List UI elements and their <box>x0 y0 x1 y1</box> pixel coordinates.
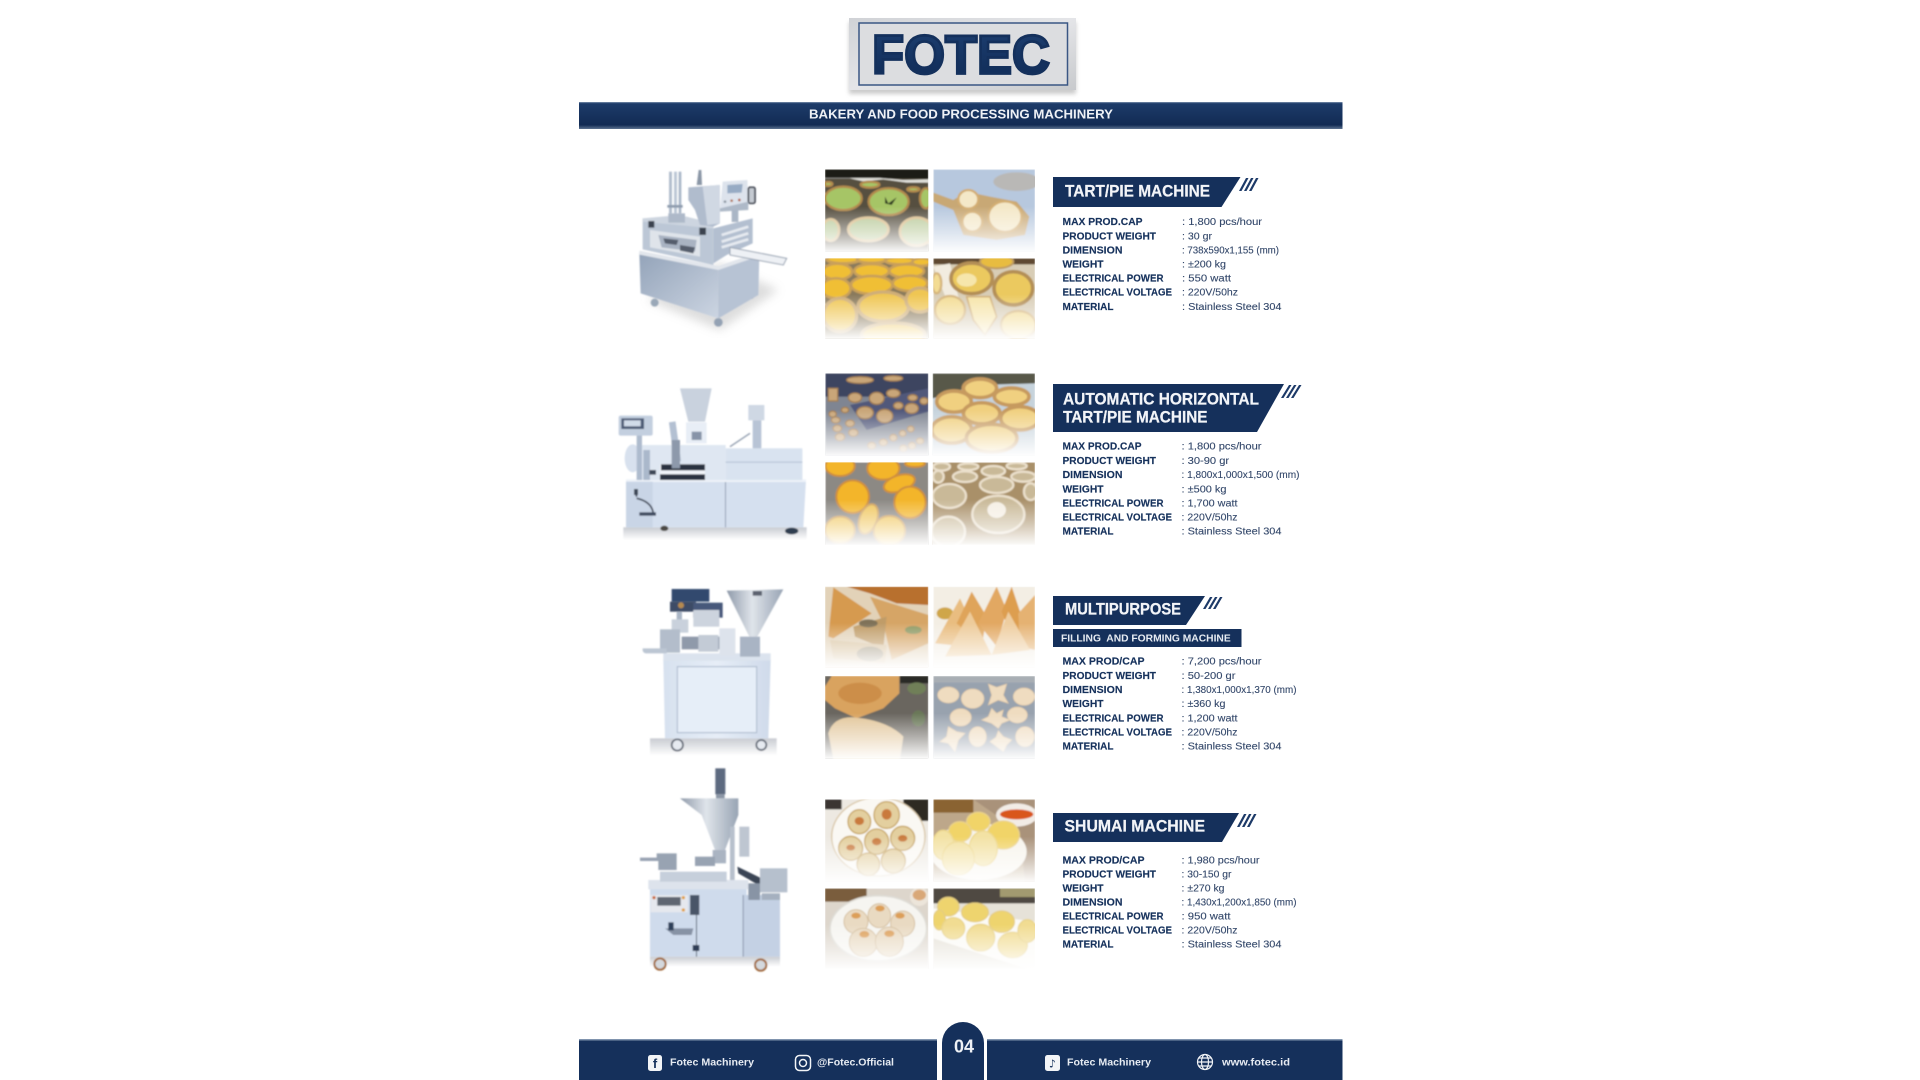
machine photo: shumai <box>640 768 787 971</box>
specifications: multipurpose: : 7,200 pcs/hour <box>1182 656 1262 668</box>
specifications: multipurpose: : Stainless Steel 304 <box>1182 741 1282 753</box>
specifications: tart/pie machine: ELECTRICAL POWER <box>1062 273 1164 285</box>
section: tart/pie machine <box>639 169 1282 347</box>
specifications: automatic horizontal: ELECTRICAL VOLTAGE <box>1062 512 1172 524</box>
specifications: automatic horizontal: : 30-90 gr <box>1182 455 1230 467</box>
specifications: multipurpose: : ±360 kg <box>1182 698 1226 710</box>
specifications: automatic horizontal: PRODUCT WEIGHT <box>1062 455 1157 467</box>
photo: shumai on plate <box>825 799 928 877</box>
icon: tiktok: ♪ <box>1049 1058 1056 1070</box>
specifications: automatic horizontal: ELECTRICAL POWER <box>1062 498 1164 510</box>
specifications: automatic horizontal: : ±500 kg <box>1182 484 1227 496</box>
icon: globe <box>1198 1054 1212 1070</box>
heading: automatic horizontal tart/pie machine: TART/PIE MACHINE <box>1063 408 1208 426</box>
heading: multipurpose <box>1053 596 1222 625</box>
specifications: multipurpose: ELECTRICAL POWER <box>1062 713 1164 725</box>
specifications: tart/pie machine: : 220V/50hz <box>1182 287 1238 299</box>
specifications: multipurpose <box>1062 656 1296 752</box>
specifications: automatic horizontal: : 1,800 pcs/hour <box>1182 441 1262 453</box>
photo: golden tarts <box>932 373 1035 456</box>
machine photo: tart/pie machine <box>639 170 787 330</box>
specifications: shumai machine: ELECTRICAL POWER <box>1062 911 1164 923</box>
specifications: tart/pie machine: : 30 gr <box>1182 230 1212 242</box>
photo: tart shells <box>933 258 1035 338</box>
section: automatic horizontal tart/pie machine <box>619 373 1302 547</box>
specifications: multipurpose: : 1,200 watt <box>1182 713 1238 725</box>
logo: FOTEC <box>849 18 1076 94</box>
machine photo: automatic horizontal <box>619 388 807 540</box>
specifications: automatic horizontal: MAX PROD.CAP <box>1062 441 1142 453</box>
specifications: tart/pie machine: MATERIAL <box>1062 301 1114 313</box>
machine photo: multipurpose <box>643 589 783 756</box>
photo: cream pies <box>932 462 1035 545</box>
specifications: shumai machine: ELECTRICAL VOLTAGE <box>1062 925 1172 937</box>
specifications: shumai machine: : 1,980 pcs/hour <box>1182 855 1260 867</box>
specifications: automatic horizontal: WEIGHT <box>1062 484 1104 496</box>
footer bar <box>579 1022 1342 1080</box>
icon: facebook <box>648 1055 662 1071</box>
title banner: BAKERY AND FOOD PROCESSING MACHINERY <box>809 106 1113 122</box>
specifications: multipurpose: : 1,380x1,000x1,370 (mm) <box>1182 684 1296 696</box>
specifications: tart/pie machine: : 1,800 pcs/hour <box>1182 216 1263 228</box>
specifications: automatic horizontal: MATERIAL <box>1062 526 1114 538</box>
specifications: multipurpose: DIMENSION <box>1062 684 1122 696</box>
specifications: tart/pie machine: : 738x590x1,155 (mm) <box>1182 244 1279 256</box>
photo: tart shells on tray <box>825 373 928 456</box>
tiktok label: Fotec Machinery <box>1067 1056 1151 1068</box>
specifications: multipurpose: : 220V/50hz <box>1182 727 1238 739</box>
specifications: tart/pie machine: : 550 watt <box>1182 273 1231 285</box>
instagram label: @Fotec.Official <box>817 1056 894 1068</box>
section: shumai machine <box>640 768 1296 971</box>
specifications: shumai machine: PRODUCT WEIGHT <box>1062 869 1157 881</box>
specifications: multipurpose: ELECTRICAL VOLTAGE <box>1062 727 1172 739</box>
section: multipurpose machine <box>643 587 1296 758</box>
photo: yellow shumai with sauce <box>933 799 1035 882</box>
specifications: tart/pie machine: : Stainless Steel 304 <box>1182 301 1282 313</box>
specifications: shumai machine: : Stainless Steel 304 <box>1182 939 1282 951</box>
photo: shumai on tray <box>933 888 1035 962</box>
facebook label: Fotec Machinery <box>670 1056 754 1068</box>
specifications: tart/pie machine: DIMENSION <box>1062 244 1122 256</box>
specifications: shumai machine: DIMENSION <box>1062 897 1122 909</box>
icon: instagram <box>796 1056 810 1070</box>
heading: automatic horizontal tart/pie machine: AUTOMATIC HORIZONTAL <box>1063 390 1259 408</box>
photo: cookies <box>933 676 1035 758</box>
photo: pastry triangles <box>934 586 1035 658</box>
sub-heading: filling and forming machine <box>1053 629 1242 647</box>
heading: tart/pie machine <box>1053 177 1258 207</box>
heading: tart/pie machine: TART/PIE MACHINE <box>1065 182 1210 200</box>
specifications: multipurpose: : 50-200 gr <box>1182 670 1236 682</box>
photo: samosas <box>825 586 928 668</box>
specifications: shumai machine: WEIGHT <box>1062 883 1104 895</box>
page number tab <box>942 1022 984 1080</box>
specifications: shumai machine: : 1,430x1,200x1,850 (mm) <box>1182 897 1296 909</box>
food photos: multipurpose <box>825 587 1035 758</box>
sub-heading: filling and forming machine: FILLING AND FORMING MACHINE <box>1061 632 1231 644</box>
specifications: shumai machine: MAX PROD/CAP <box>1062 855 1144 867</box>
specifications: shumai machine: : 220V/50hz <box>1182 925 1238 937</box>
specifications: automatic horizontal: : 220V/50hz <box>1182 512 1238 524</box>
website label: www.fotec.id <box>1221 1056 1290 1068</box>
specifications: multipurpose: PRODUCT WEIGHT <box>1062 670 1157 682</box>
photo: empanadas <box>825 676 928 758</box>
specifications: tart/pie machine: : ±200 kg <box>1182 258 1226 270</box>
specifications: multipurpose: WEIGHT <box>1062 698 1104 710</box>
specifications: shumai machine: : 950 watt <box>1182 911 1231 923</box>
specifications: automatic horizontal: : 1,700 watt <box>1182 498 1238 510</box>
specifications: tart/pie machine: ELECTRICAL VOLTAGE <box>1062 287 1172 299</box>
specifications: automatic horizontal: DIMENSION <box>1062 469 1122 481</box>
specifications: multipurpose: MATERIAL <box>1062 741 1114 753</box>
photo: cream tarts on board <box>933 170 1035 251</box>
page number tab: 04 <box>954 1036 974 1056</box>
heading: shumai machine: SHUMAI MACHINE <box>1064 818 1205 836</box>
specifications: shumai machine: MATERIAL <box>1062 939 1114 951</box>
logo: FOTEC: FOTEC <box>872 24 1050 86</box>
specifications: automatic horizontal <box>1062 440 1300 538</box>
specifications: shumai machine <box>1062 854 1296 950</box>
specifications: tart/pie machine: PRODUCT WEIGHT <box>1062 230 1157 242</box>
photo: egg tarts <box>825 258 928 338</box>
specifications: shumai machine: : 30-150 gr <box>1182 869 1232 881</box>
specifications: shumai machine: : ±270 kg <box>1182 883 1225 895</box>
heading: automatic horizontal tart/pie machine <box>1053 384 1302 432</box>
icon: tiktok <box>1045 1055 1060 1071</box>
photo: orange tarts <box>825 462 928 545</box>
specifications: tart/pie machine: WEIGHT <box>1062 258 1104 270</box>
heading: shumai machine <box>1053 813 1256 842</box>
food photos: tart/pie <box>821 169 1040 347</box>
specifications: tart/pie machine: MAX PROD.CAP <box>1062 216 1142 228</box>
icon: facebook: f <box>653 1056 658 1071</box>
specifications: automatic horizontal: : Stainless Steel 304 <box>1182 526 1282 538</box>
specifications: tart/pie machine <box>1062 216 1282 313</box>
title banner <box>579 102 1342 129</box>
photo: green tarts <box>825 169 928 252</box>
specifications: multipurpose: MAX PROD/CAP <box>1062 656 1144 668</box>
photo: shumai white plate <box>825 888 928 968</box>
specifications: automatic horizontal: : 1,800x1,000x1,500 (mm) <box>1182 469 1300 481</box>
food photos: shumai <box>825 797 1037 969</box>
food photos: horizontal <box>825 373 1039 547</box>
heading: multipurpose: MULTIPURPOSE <box>1065 600 1181 618</box>
